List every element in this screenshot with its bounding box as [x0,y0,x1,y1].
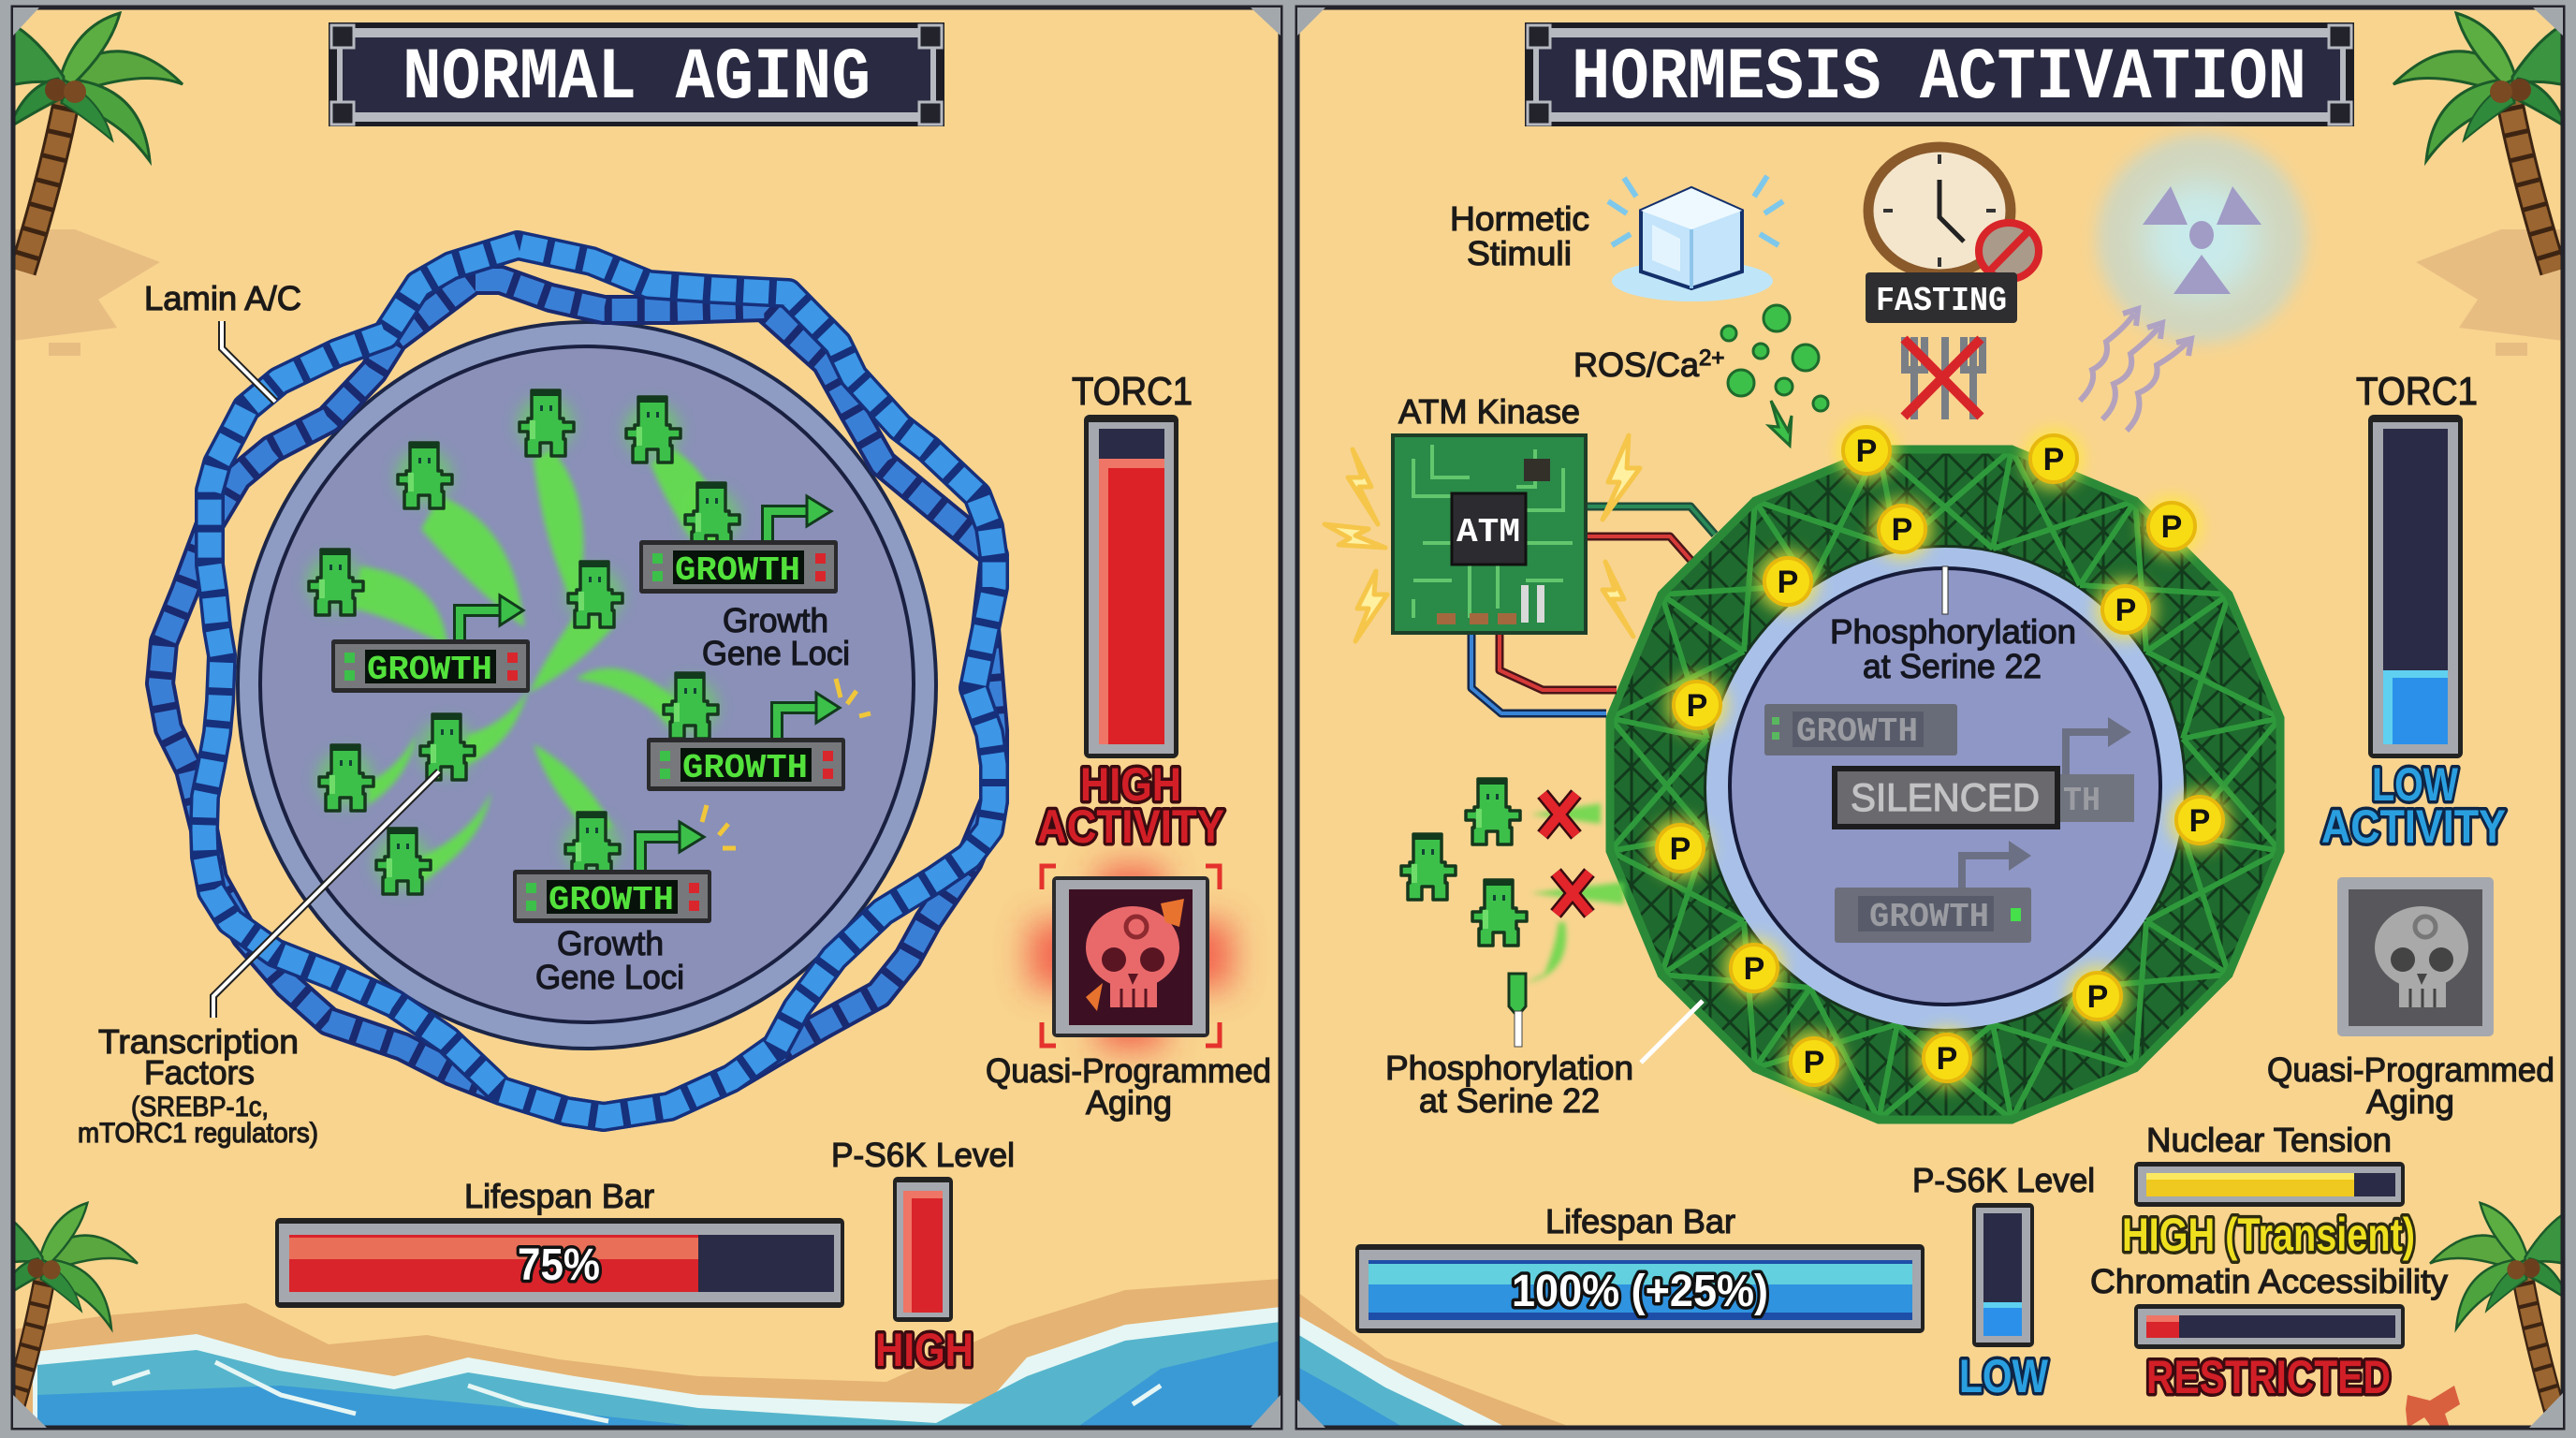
sand shadow left [13,229,160,356]
icon: palm top right [2393,13,2569,271]
gauge: TORC1 high [1084,415,1178,758]
phospho tokens: P [1778,565,1798,600]
nucleus: right disc [1706,548,2184,1029]
growth gene plate 3: GROWTH [682,749,808,787]
label: transcription factors [78,1022,318,1149]
label: transcription factors: Transcription [98,1022,299,1061]
silenced gene plate behind [2050,717,2134,822]
icon: ice cube [1608,176,1783,301]
phospho tokens: P [2087,979,2108,1015]
growth gene plate 1 [639,496,838,594]
gauge: nuclear tension [2134,1162,2405,1207]
label: high p-s6k: HIGH [875,1324,973,1376]
icon: palm bottom left [0,1203,138,1423]
transcription factor trails [354,449,722,885]
growth gene plate 2: GROWTH [367,651,492,689]
icon: blocked transcription factors [1401,779,1624,1013]
label: quasi-programmed aging left [986,1051,1271,1122]
phospho tokens: P [1670,831,1690,867]
label: quasi-programmed aging left: Quasi-Programmed [986,1051,1271,1090]
phospho tokens: P [2189,803,2210,839]
growth gene plate 1: GROWTH [675,551,800,590]
label: hormetic stimuli: Hormetic [1450,199,1589,238]
gauge: lifespan 75 percent [275,1218,844,1308]
icon: palm bottom right [2430,1203,2570,1423]
gauge: lifespan 75 percent: 75% [518,1240,600,1290]
panel: left background [13,7,1281,1428]
label: phosphorylation inside [1830,612,2076,685]
label: transcription factors: mTORC1 regulators) [78,1118,318,1149]
label: TORC1 right: TORC1 [2356,369,2478,413]
label: high transient: HIGH (Transient) [2122,1209,2415,1261]
label: quasi-programmed aging right [2267,1050,2554,1121]
label: phosphorylation left: at Serine 22 [1419,1081,1600,1120]
gauge: p-s6k high [893,1177,953,1322]
beach: right shore [1297,1292,1573,1428]
icon: ATM chip with sparks [1325,433,1640,641]
beach: left shore [13,1279,1281,1428]
label: growth gene loci bottom [535,924,684,996]
icon: red skull [1030,866,1232,1049]
label: TORC1 left: TORC1 [1072,369,1193,413]
label: p-s6k right: P-S6K Level [1912,1161,2095,1199]
label: growth gene loci top: Gene Loci [702,634,850,672]
label: lamin A/C: Lamin A/C [144,279,301,317]
label: p-s6k left: P-S6K Level [831,1136,1015,1174]
leader: transcription factors [213,771,439,1018]
label: low p-s6k: LOW [1959,1350,2049,1402]
phospho tokens: P [2115,593,2136,628]
arrows: radiation waves [2080,309,2191,431]
sand shadow right [2416,229,2563,356]
gauge: lifespan 100 percent: 100% (+25%) [1512,1267,1768,1316]
label: phosphorylation inside: at Serine 22 [1863,647,2042,685]
nucleus: left disc [238,322,936,1049]
icon: fork and knife crossed [1904,337,1983,419]
label: growth gene loci top: Growth [723,601,828,639]
icon: ROS particles [1721,305,1828,446]
label: low activity: ACTIVITY [2321,800,2506,853]
label: restricted: RESTRICTED [2146,1351,2391,1403]
silenced banner [1832,766,2060,829]
growth gene plate 3 [647,679,871,791]
phospho tokens: P [1937,1041,1957,1077]
growth gene plate 4: GROWTH [549,881,674,919]
label: phosphorylation left: Phosphorylation [1385,1049,1633,1087]
leader: phosphorylation [1641,1001,1703,1063]
label: phosphorylation left [1385,1049,1633,1120]
gauge: p-s6k low [1972,1203,2034,1347]
label: fasting tag: FASTING [1876,282,2007,320]
label: lifespan right: Lifespan Bar [1545,1202,1735,1240]
title: normal aging: NORMAL AGING [402,37,871,120]
label: transcription factors: Factors [144,1053,255,1092]
label: high activity: ACTIVITY [1037,800,1224,853]
label: ATM kinase: ATM Kinase [1398,392,1580,431]
label: high activity [1037,758,1224,853]
phospho tokens: P [2043,442,2064,477]
icon: transcription factors [307,390,739,894]
label: low activity: LOW [2372,758,2459,811]
growth gene plate 4 [513,805,736,923]
phospho tokens: P [1804,1045,1824,1080]
label: quasi-programmed aging right: Aging [2366,1082,2454,1121]
label: growth gene loci top [702,601,850,672]
gauge: chromatin accessibility [2134,1304,2405,1349]
icon: clock [1868,147,2011,274]
icon: palm top left [7,13,183,271]
leader: phosphorylation inside [1942,566,1948,614]
title: hormesis activation: HORMESIS ACTIVATION [1572,37,2306,120]
icon: ATM chip with sparks: ATM [1456,513,1520,551]
nucleus: right net lamina [1610,449,2280,1120]
label: lifespan left: Lifespan Bar [464,1177,654,1215]
silenced gene plate behind: TH [2063,782,2100,820]
title: normal aging [329,22,944,126]
phospho tokens: P [1744,951,1764,987]
icon: no symbol [1979,223,2039,279]
label: growth gene loci bottom: Growth [557,924,664,962]
label: transcription factors: (SREBP-1c, [131,1092,269,1123]
silenced gene plate bottom [1835,841,2031,943]
growth gene plate 2 [331,595,530,693]
silenced gene plate top: GROWTH [1796,712,1918,751]
label: ROS/Ca2+: ROS/Ca [1573,345,1699,384]
label: quasi-programmed aging right: Quasi-Programmed [2267,1050,2554,1089]
label: ROS/Ca2+: 2+ [1699,345,1724,371]
gauge: lifespan 100 percent [1355,1244,1925,1333]
label: high activity: HIGH [1080,758,1181,811]
label: chromatin accessibility: Chromatin Accessibility [2090,1262,2448,1300]
phospho tokens: P [1856,433,1877,469]
phospho tokens [1649,419,2231,1093]
label: growth gene loci bottom: Gene Loci [535,958,684,996]
icon: gray skull [2337,877,2494,1036]
wires: chip to nucleus [1471,506,1715,713]
icon: crab [2406,1386,2460,1431]
phospho tokens: P [1687,688,1707,724]
panel: right background [1297,7,2563,1428]
label: low activity [2321,758,2506,853]
label: phosphorylation inside: Phosphorylation [1830,612,2076,651]
lamin A/C chains [160,245,994,1117]
label: hormetic stimuli [1450,199,1589,272]
label: hormetic stimuli: Stimuli [1467,234,1572,272]
label: quasi-programmed aging left: Aging [1086,1083,1172,1122]
silenced banner: SILENCED [1851,775,2040,819]
silenced gene plate bottom: GROWTH [1869,898,1989,936]
phospho tokens: P [1892,512,1912,548]
icon: radiation [2097,134,2306,344]
phospho tokens: P [2161,509,2182,545]
gauge: TORC1 low [2368,415,2463,758]
leader: lamin [222,321,275,402]
leader: bottom marker [1515,1011,1522,1047]
silenced gene plate top [1764,704,1957,756]
label: nuclear tension: Nuclear Tension [2146,1121,2392,1159]
